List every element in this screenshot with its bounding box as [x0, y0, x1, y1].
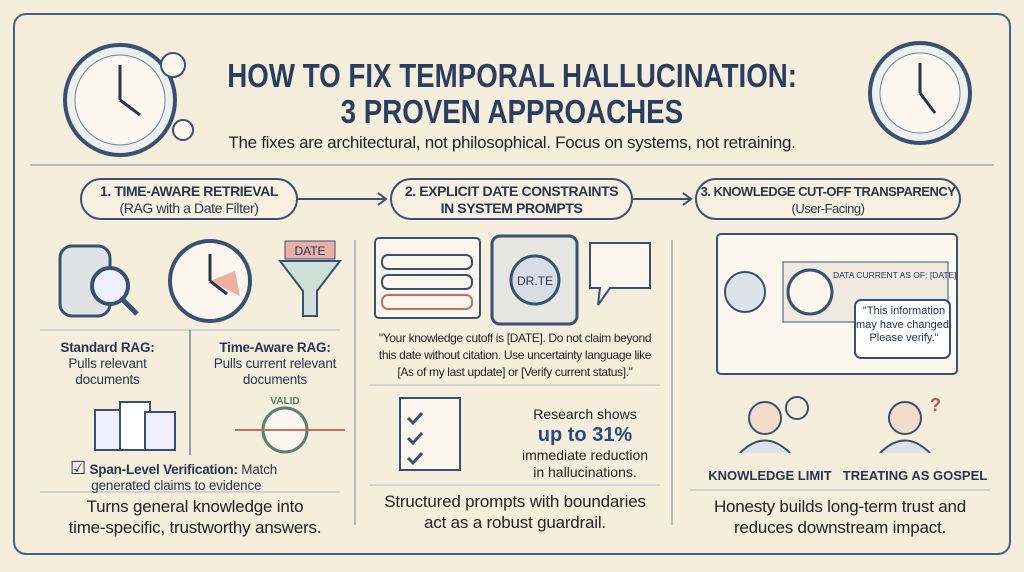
text: span-level verification: generated claims to evidence — [91, 478, 261, 493]
text: standard rag: Pulls relevant — [68, 356, 147, 371]
icon: knowledge limit person — [739, 396, 809, 453]
icon: prompt window, safe, bubble — [374, 234, 651, 326]
icon: prompt window, safe, bubble: DR.TE — [517, 274, 553, 288]
icon: database clock funnel: DATE — [294, 244, 326, 258]
panel: knowledge cut-off transparency — [695, 178, 987, 537]
text: span-level verification — [70, 458, 277, 493]
icon: melting clock left — [63, 43, 194, 157]
text: research stat: immediate reduction — [522, 447, 648, 463]
text: conclusion 1: Turns general knowledge into — [87, 497, 303, 516]
text: research stat: up to 31% — [538, 424, 632, 446]
text: conclusion 2: act as a robust guardrail. — [424, 513, 606, 532]
text: research stat — [522, 406, 648, 480]
heading 2: IN SYSTEM PROMPTS — [441, 200, 582, 216]
text: conclusion 3: Honesty builds long-term trust and — [714, 497, 966, 516]
text: conclusion 2: Structured prompts with boundaries — [384, 492, 646, 511]
text: prompt quote: "Your knowledge cutoff is [DATE]. Do not claim beyond — [379, 331, 651, 345]
heading 1: 1. TIME-AWARE RETRIEVAL — [100, 183, 278, 199]
title: HOW TO FIX TEMPORAL HALLUCINATION: — [227, 57, 797, 94]
icon: documents — [94, 396, 345, 454]
title — [227, 57, 797, 130]
text: research stat: Research shows — [533, 406, 637, 422]
icon: documents: VALID — [270, 396, 300, 407]
text: standard rag: documents — [75, 372, 140, 387]
subtitle: The fixes are architectural, not philosophical. Focus on systems, not retraining. — [228, 133, 796, 152]
text: time-aware rag: Pulls current relevant — [214, 356, 336, 371]
text: standard rag — [60, 340, 155, 387]
heading 3: (User-Facing) — [792, 201, 864, 216]
text: conclusion 1: time-specific, trustworthy answers. — [69, 518, 321, 537]
panel: time-aware retrieval — [58, 178, 345, 537]
text: time-aware rag: documents — [243, 372, 307, 387]
icon: app window with notice — [716, 233, 958, 375]
text: time-aware rag: Time-Aware RAG: — [219, 340, 331, 355]
text: prompt quote: this date without citation. Use uncertainty language like — [379, 348, 651, 362]
text: notice: "This information may have changed. Please verify." — [856, 305, 952, 344]
panel: explicit date constraints — [374, 178, 651, 532]
text: span-level verification: ☑ Span-Level Verification: Match — [70, 458, 277, 478]
heading 1: (RAG with a Date Filter) — [120, 200, 258, 216]
icon: gospel person: ? — [930, 395, 941, 415]
text: prompt quote — [379, 331, 651, 379]
heading 2: 2. EXPLICIT DATE CONSTRAINTS — [405, 183, 618, 199]
text: conclusion 2 — [384, 492, 646, 532]
text: conclusion 1 — [68, 497, 321, 537]
label: treating as gospel: TREATING AS GOSPEL — [843, 468, 987, 483]
icon: melting clock right — [868, 41, 972, 145]
label: knowledge limit: KNOWLEDGE LIMIT — [708, 468, 832, 483]
text: standard rag: Standard RAG: — [60, 340, 155, 355]
title: 3 PROVEN APPROACHES — [341, 93, 683, 130]
text: time-aware rag — [214, 340, 336, 387]
heading 3 — [695, 178, 961, 220]
icon: checklist — [399, 397, 461, 471]
icon: gospel person — [879, 395, 941, 453]
text: conclusion 3: reduces downstream impact. — [734, 518, 946, 537]
text: conclusion 3 — [714, 497, 966, 537]
text: research stat: in hallucinations. — [533, 464, 637, 480]
text: data current as of: DATA CURRENT AS OF: [DATE] — [833, 270, 957, 280]
icon: database clock funnel — [58, 239, 342, 323]
heading 3: 3. KNOWLEDGE CUT-OFF TRANSPARENCY — [701, 184, 955, 199]
heading 1 — [80, 178, 298, 220]
heading 2 — [390, 178, 633, 220]
text: prompt quote: [As of my last update] or [Verify current status]." — [397, 365, 633, 379]
